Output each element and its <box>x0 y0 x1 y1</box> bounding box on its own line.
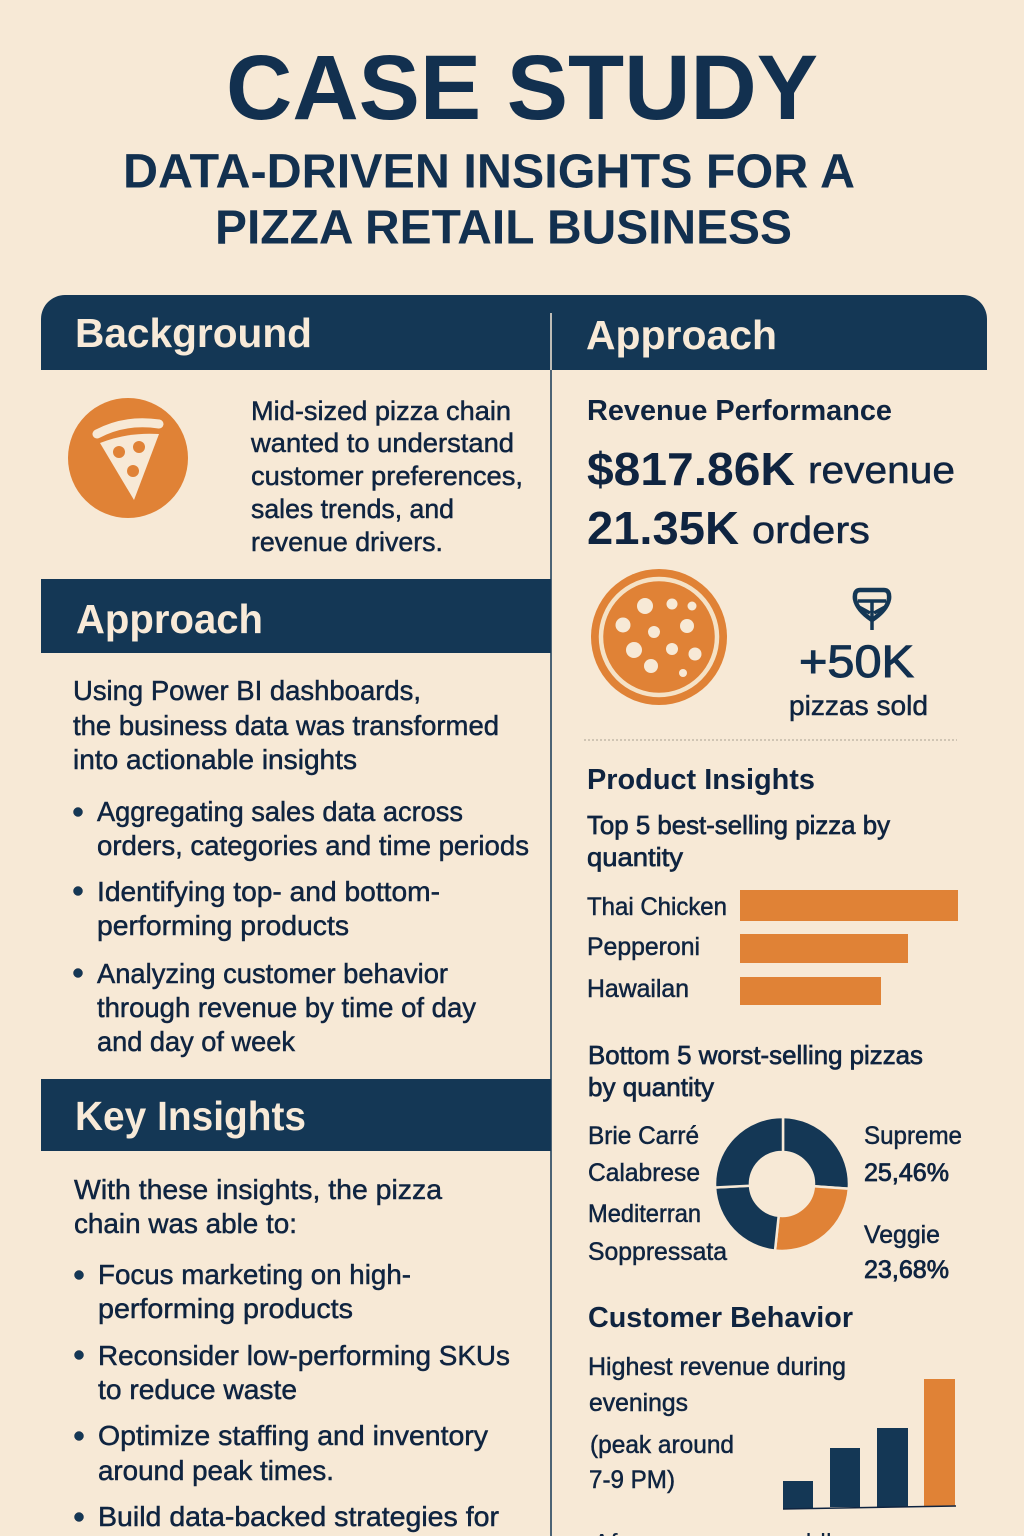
stat: orders: 21.35K <box>587 502 739 554</box>
bar chart: revenue by time <box>783 1379 956 1509</box>
title <box>123 37 855 254</box>
bar chart: top pizzas: Pepperoni <box>587 933 700 961</box>
list: key insights outcomes: to reduce waste <box>98 1374 297 1405</box>
labels: supreme and veggie share: 25,46% <box>864 1159 949 1187</box>
bar chart: top pizzas: Hawailan <box>587 975 689 1003</box>
list: key insights outcomes: Reconsider low-performing SKUs <box>98 1340 510 1371</box>
list: key insights outcomes: performing products <box>98 1293 353 1324</box>
list: approach steps: Aggregating sales data across <box>97 796 463 827</box>
heading: revenue performance: Revenue Performance <box>587 395 892 427</box>
icon: pizza slice <box>68 398 188 518</box>
stat: revenue: revenue <box>808 450 955 492</box>
text: background description: revenue drivers. <box>251 527 443 557</box>
panel: background header <box>41 295 987 370</box>
text: approach intro <box>73 675 499 775</box>
list: approach steps: through revenue by time of day <box>97 992 476 1023</box>
icon: whole pizza <box>591 569 727 705</box>
title: DATA-DRIVEN INSIGHTS FOR A <box>123 146 855 198</box>
donut chart <box>715 1117 849 1251</box>
text: top 5 subtitle: Top 5 best-selling pizza by <box>587 810 890 840</box>
legend: pizza names <box>588 1122 727 1266</box>
labels: supreme and veggie share: 23,68% <box>864 1256 949 1284</box>
labels: supreme and veggie share: Supreme <box>864 1122 962 1150</box>
stat: revenue <box>587 443 955 495</box>
legend: pizza names: Soppressata <box>588 1238 727 1266</box>
text: background description: sales trends, and <box>251 494 454 524</box>
panel: background header: Background <box>75 310 312 356</box>
text: customer behavior details: evenings <box>589 1389 688 1417</box>
text: bottom 5 subtitle <box>588 1040 923 1102</box>
list: key insights outcomes: Optimize staffing and inventory <box>98 1420 488 1451</box>
text: background description: wanted to understand <box>250 428 514 458</box>
legend: pizza names: Brie Carré <box>588 1122 699 1150</box>
list: approach steps: orders, categories and time periods <box>97 830 529 861</box>
text: background description: Mid-sized pizza chain <box>251 396 511 426</box>
stat: pizzas sold: +50K <box>799 636 914 687</box>
heading: approach: Approach <box>76 596 263 642</box>
text: approach intro: the business data was transformed <box>73 710 499 741</box>
text: background description: customer preferences, <box>251 461 523 491</box>
text: key insights intro: chain was able to: <box>74 1208 297 1239</box>
stat: pizzas sold <box>789 636 928 721</box>
title: CASE STUDY <box>226 37 818 139</box>
stat: orders: orders <box>752 510 870 552</box>
text: customer behavior details <box>588 1353 846 1494</box>
list: approach steps <box>74 796 529 1057</box>
legend: pizza names: Calabrese <box>588 1159 700 1187</box>
stat: pizzas sold: pizzas sold <box>789 690 928 721</box>
text: approach intro: into actionable insights <box>73 744 357 775</box>
labels: supreme and veggie share <box>864 1122 962 1284</box>
icon: pizza peel <box>855 590 889 630</box>
heading: product insights: Product Insights <box>587 764 815 796</box>
stat: revenue: $817.86K <box>587 443 795 495</box>
text: approach intro: Using Power BI dashboards, <box>73 675 421 706</box>
text: key insights intro: With these insights, the pizza <box>74 1174 442 1205</box>
text: customer behavior details: 7-9 PM) <box>589 1466 675 1494</box>
legend: pizza names: Mediterran <box>588 1200 701 1228</box>
stat: orders <box>587 502 870 554</box>
list: key insights outcomes <box>74 1259 510 1532</box>
text: top 5 subtitle: quantity <box>587 842 683 872</box>
clipped text at bottom edge <box>593 1528 832 1536</box>
list: approach steps: and day of week <box>97 1026 296 1057</box>
text: customer behavior details: (peak around <box>590 1431 734 1459</box>
bar chart: top pizzas: Thai Chicken <box>587 893 727 921</box>
heading: key insights: Key Insights <box>75 1093 306 1139</box>
heading: customer behavior: Customer Behavior <box>588 1302 853 1334</box>
list: approach steps: Identifying top- and bottom- <box>97 876 440 907</box>
text: customer behavior details: Highest revenue during <box>588 1353 846 1381</box>
heading: approach <box>41 579 551 653</box>
text: bottom 5 subtitle: by quantity <box>588 1072 714 1102</box>
heading: key insights <box>41 1079 551 1151</box>
list: key insights outcomes: Focus marketing on high- <box>98 1259 411 1290</box>
list: key insights outcomes: Build data-backed strategies for <box>98 1501 499 1532</box>
list: approach steps: Analyzing customer behavior <box>97 958 448 989</box>
text: top 5 subtitle <box>587 810 890 872</box>
bar chart: top pizzas <box>587 890 958 1005</box>
labels: supreme and veggie share: Veggie <box>864 1221 940 1249</box>
panel: background header: Approach <box>586 312 777 358</box>
text: background description <box>250 396 523 557</box>
title: PIZZA RETAIL BUSINESS <box>215 202 792 254</box>
text: bottom 5 subtitle: Bottom 5 worst-selling pizzas <box>588 1040 923 1070</box>
text: key insights intro <box>74 1174 442 1239</box>
list: key insights outcomes: around peak times. <box>98 1455 334 1486</box>
list: approach steps: performing products <box>97 910 349 941</box>
